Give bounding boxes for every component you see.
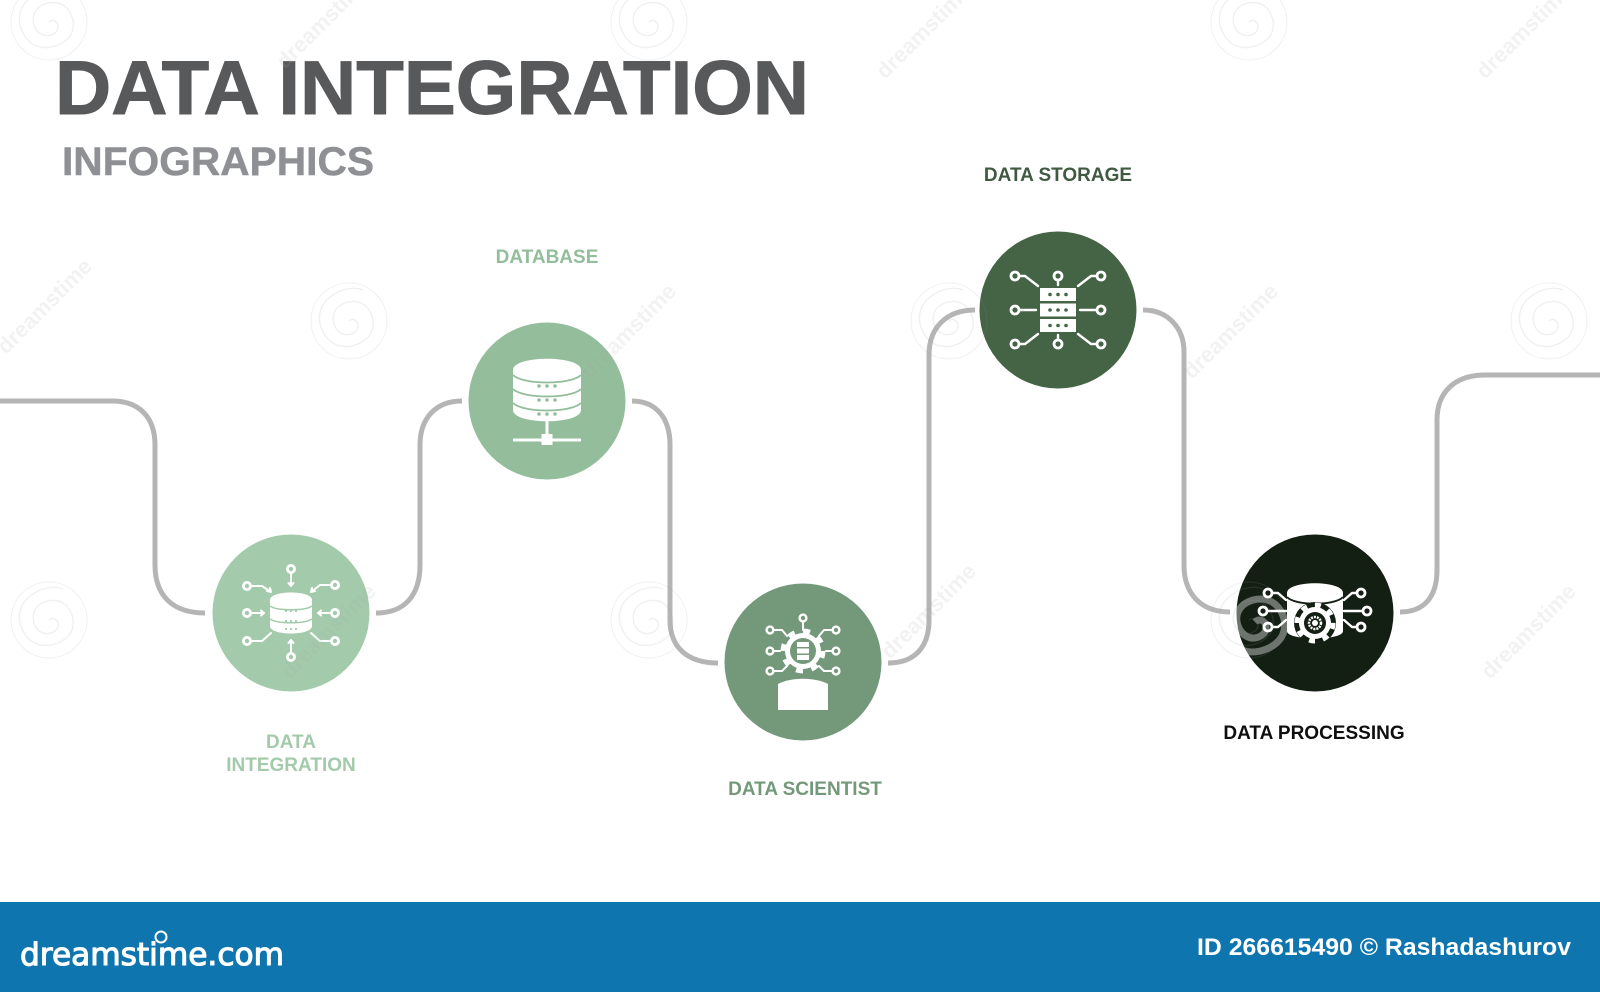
subtitle: INFOGRAPHICS bbox=[62, 140, 374, 184]
circle: data storage bbox=[980, 232, 1136, 388]
footer bar bbox=[0, 902, 1600, 992]
icon: server with circuit nodes bbox=[1011, 272, 1105, 348]
infographic canvas: dreamstime bbox=[876, 559, 981, 664]
step 1: data integration bbox=[212, 534, 370, 776]
step 5: data processing bbox=[1223, 534, 1405, 744]
infographic canvas: dreamstime bbox=[1178, 279, 1283, 384]
title: DATA INTEGRATION bbox=[55, 46, 809, 131]
label: data storage: DATA STORAGE bbox=[984, 165, 1132, 186]
label: data processing: DATA PROCESSING bbox=[1223, 723, 1405, 744]
label: database: DATABASE bbox=[496, 247, 598, 268]
circle: data integration bbox=[212, 534, 370, 692]
label: data integration: INTEGRATION bbox=[226, 755, 356, 776]
infographic canvas: dreamstime bbox=[276, 579, 381, 684]
image id and credit: ID 266615490 © Rashadashurov bbox=[1197, 934, 1571, 961]
logo: dreamstime: dreamstime.com bbox=[20, 937, 284, 973]
icon: data scientist with gear bbox=[767, 615, 839, 710]
icon: networked database bbox=[513, 359, 581, 445]
step 2: database bbox=[468, 247, 626, 480]
connector line bbox=[0, 310, 1600, 663]
label: data integration: DATA bbox=[266, 732, 316, 753]
circle: data scientist bbox=[724, 584, 882, 740]
infographic canvas: dreamstime bbox=[576, 279, 681, 384]
icon: logo spiral bbox=[156, 932, 166, 942]
icon: database with incoming circuits bbox=[243, 565, 339, 661]
step 3: data scientist bbox=[724, 584, 882, 800]
circle: data processing bbox=[1236, 534, 1394, 692]
step 4: data storage bbox=[980, 165, 1136, 388]
icon: database with gear and circuits bbox=[1259, 583, 1371, 644]
circle: database bbox=[468, 322, 626, 480]
infographic canvas: dreamstime bbox=[1476, 579, 1581, 684]
label: data scientist: DATA SCIENTIST bbox=[728, 779, 882, 800]
